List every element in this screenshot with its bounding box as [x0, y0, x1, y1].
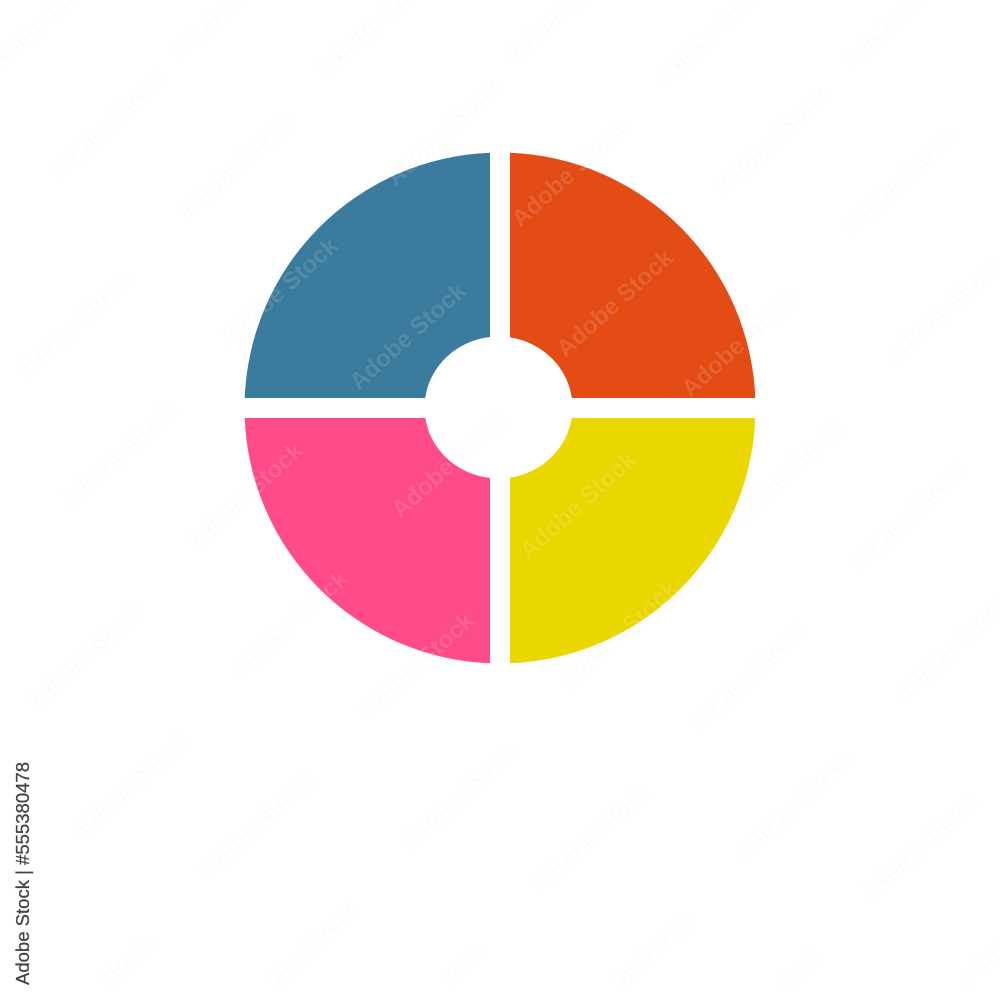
- watermark pattern: Adobe Stock: [344, 277, 472, 396]
- watermark pattern: Adobe Stock: [226, 565, 354, 684]
- watermark pattern: be Stock: [608, 906, 700, 993]
- watermark pattern: Adobe Stock: [686, 616, 814, 735]
- watermark pattern: Adobe Stock: [396, 737, 524, 856]
- watermark pattern: Adobe Stock: [46, 64, 174, 183]
- segment: pink bottom-left: [245, 418, 490, 663]
- watermark pattern: Adobe Stock: [846, 456, 974, 575]
- watermark pattern: Adobe Stock: [181, 437, 309, 556]
- watermark pattern: Adobe Stock: [556, 575, 684, 694]
- watermark pattern: Adobe Stock: [56, 395, 184, 514]
- watermark pattern: Adobe Stock: [11, 265, 139, 384]
- watermark pattern: Adobe Stock: [173, 106, 301, 225]
- watermark pattern: Adobe Stock: [731, 746, 859, 865]
- watermark pattern: Adobe Stock: [66, 727, 194, 846]
- watermark pattern: tock: [435, 937, 490, 990]
- donut chart: [245, 153, 755, 663]
- watermark pattern: Adobe Stock: [192, 767, 320, 886]
- watermark pattern: Adobe Stock: [551, 244, 679, 363]
- segment: orange top-right: [510, 153, 755, 398]
- segment: blue top-left: [245, 153, 490, 398]
- watermark pattern: Adobe Stock: [514, 446, 642, 565]
- watermark pattern: Adobe Stock: [386, 405, 514, 524]
- watermark pattern: Adobe Stock: [836, 122, 964, 241]
- watermark pattern: Adobe Stock: [506, 114, 634, 233]
- watermark pattern: Adobe Stock: [856, 788, 984, 907]
- watermark pattern: Adobe Stock: [676, 284, 804, 403]
- watermark pattern: Adobe Stock: [526, 778, 654, 897]
- segment: yellow bottom-right: [510, 418, 755, 663]
- watermark pattern: obe Stock: [262, 896, 365, 993]
- watermark pattern: Adobe Stock: [709, 81, 837, 200]
- watermark pattern: Adobe Stock: [721, 415, 849, 534]
- watermark pattern: Stock: [93, 929, 160, 993]
- watermark pattern: Adobe Stock: [381, 73, 509, 192]
- watermark pattern: tock: [772, 942, 827, 995]
- stock id caption: Adobe Stock | #555380478: [13, 762, 33, 985]
- watermark pattern: Adobe Stock: [352, 607, 480, 726]
- watermark pattern: Adobe Stock: [216, 232, 344, 351]
- watermark pattern: Adobe Stock: [21, 597, 149, 716]
